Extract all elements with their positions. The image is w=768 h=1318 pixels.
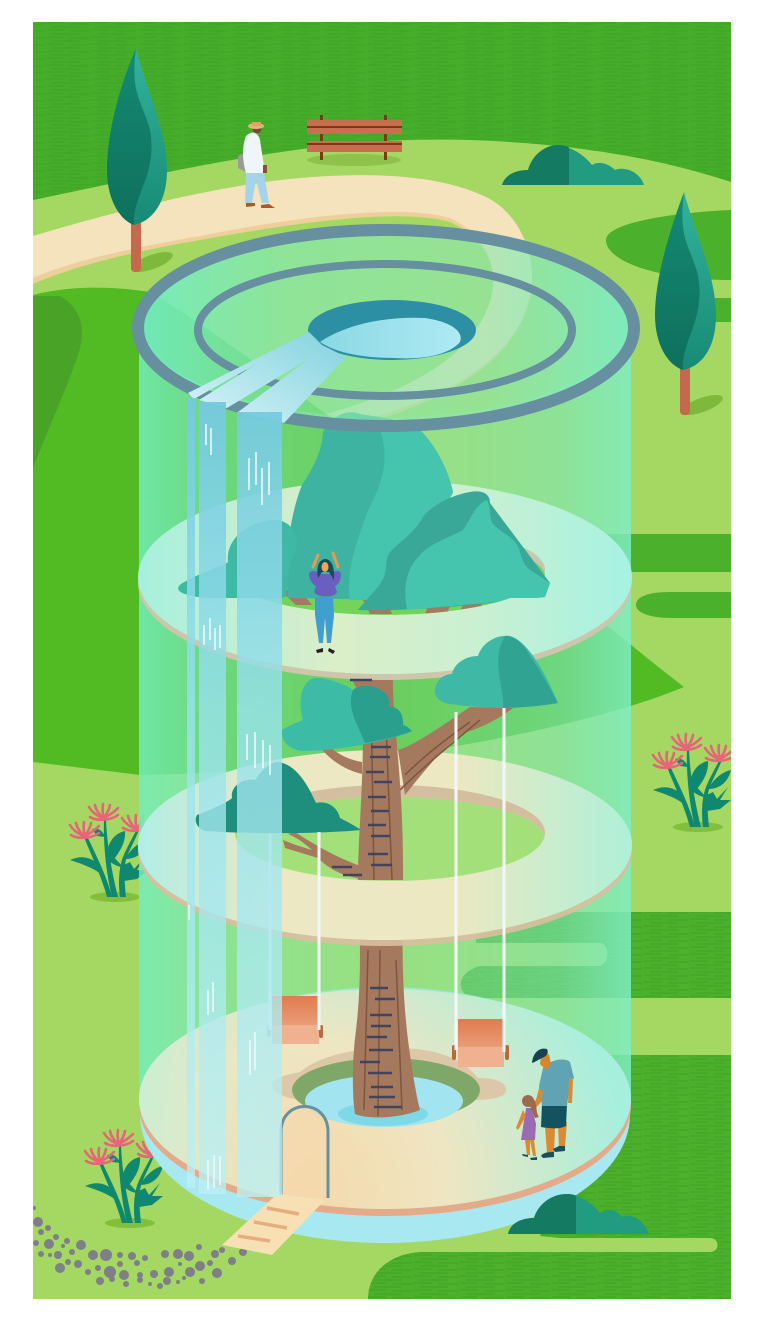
plant bottom left [85, 1130, 166, 1228]
bench [307, 115, 402, 166]
dad [530, 1049, 574, 1158]
waterfall strips [187, 398, 282, 1197]
cypress tree right [655, 192, 725, 419]
middle ring front section [138, 833, 632, 940]
canopy big top [287, 412, 453, 600]
dark grass patches right [368, 210, 731, 1299]
door arch [281, 1106, 328, 1198]
lower ladder rungs [360, 988, 402, 1107]
top disc of the tower [135, 228, 637, 428]
tree trunk full [353, 680, 420, 1117]
upper ring hole [228, 548, 545, 615]
upper branches and trunk [283, 675, 513, 880]
bright green hill [33, 288, 684, 775]
hill shadow wedge [33, 296, 82, 468]
bottom bush [508, 1194, 649, 1234]
bottom deck [139, 989, 631, 1216]
plant left upper [70, 804, 151, 902]
water base ellipse [140, 987, 630, 1243]
water highlight ticks [189, 424, 270, 1190]
pond [272, 1048, 506, 1127]
canopy center [282, 678, 412, 751]
pale stripe lower right [400, 1238, 718, 1252]
upper ring [138, 480, 632, 680]
woman with raised arms [309, 553, 341, 654]
man with hat [238, 122, 275, 208]
top bush [502, 145, 644, 185]
canopy right top [358, 491, 550, 610]
ropes [270, 708, 504, 1052]
plant right [653, 734, 734, 832]
sand footpath [33, 175, 532, 430]
girl [516, 1095, 539, 1160]
hole ground and wall of middle ring [235, 785, 545, 882]
canopy left top [178, 520, 297, 600]
swing right [452, 1019, 509, 1067]
upper ring front section [144, 598, 626, 674]
ramp [222, 1194, 325, 1255]
pebble trail [32, 1206, 247, 1289]
tree branches in upper hole [286, 590, 482, 614]
opening in top disc [308, 300, 476, 360]
canopy lower left [196, 762, 361, 833]
dark grass top [33, 22, 731, 200]
middle ladder rungs [332, 680, 392, 875]
middle ring [138, 750, 632, 946]
cypress tree left [107, 48, 175, 276]
swing left [267, 996, 323, 1044]
canopy right [435, 636, 558, 708]
glass cylinder wall [139, 328, 631, 1110]
water chute [188, 332, 346, 423]
